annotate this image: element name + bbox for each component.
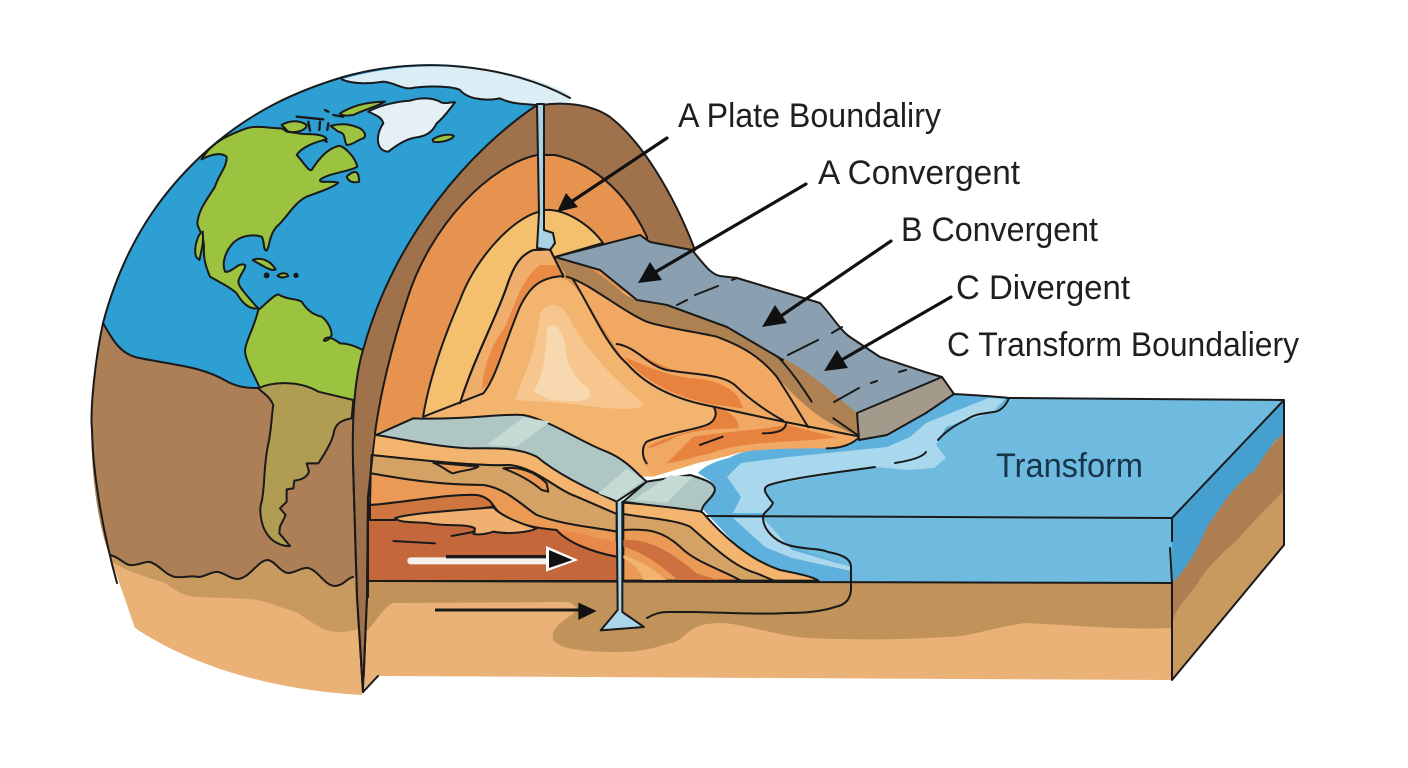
soil base: [365, 581, 1172, 688]
label: A Convergent: A Convergent: [818, 154, 1021, 192]
south america lower: [258, 383, 353, 546]
upper conduit: [537, 104, 555, 250]
peak inner highlight: [533, 325, 590, 401]
main peak body: [373, 276, 716, 477]
band lines: [567, 277, 860, 437]
wedge tick: [363, 676, 378, 692]
sand layer: [112, 562, 362, 695]
orange band: [667, 425, 837, 463]
deep channel: [698, 394, 1009, 582]
orange streak: [482, 265, 562, 390]
darker soil band: [365, 581, 1172, 652]
orange layer: [370, 473, 617, 557]
black arrow: [435, 603, 597, 620]
peach lens: [395, 507, 537, 534]
crust: [353, 104, 695, 692]
orange patch: [647, 407, 739, 448]
vertical rift upper: [537, 104, 555, 250]
wavy boundary: [110, 555, 353, 586]
lower strata: [367, 415, 818, 630]
band: [555, 257, 861, 437]
lower right orange: [642, 405, 860, 477]
pale water band: [727, 398, 1005, 513]
ice shoreline: [342, 79, 537, 105]
wedge under band: [560, 270, 860, 437]
lower soil band: [110, 555, 362, 640]
cut-away dome: [353, 104, 695, 692]
greenland: [368, 98, 455, 152]
current line: [647, 398, 1009, 618]
right grey highlight: [633, 475, 693, 503]
peach layer line: [372, 455, 617, 514]
pale water lower band: [733, 518, 851, 571]
arrow to divergent C: [824, 297, 951, 371]
right peach bottom: [623, 555, 667, 581]
globe exterior: [92, 64, 570, 695]
subducting plate: [555, 235, 954, 440]
peak shoulder: [460, 249, 563, 403]
rust base: [367, 503, 643, 581]
ocean edge lines: [370, 394, 1284, 680]
mantle: [375, 155, 650, 433]
north america: [195, 102, 454, 403]
rust mid layer: [370, 495, 493, 520]
mountain outlines: [423, 249, 860, 463]
lower conduit: [601, 502, 644, 630]
wedge overlay: [353, 433, 375, 692]
plate dashes: [677, 278, 906, 402]
lens peach: [617, 344, 783, 421]
soil front face: [365, 400, 1284, 688]
ocean surface and front: [698, 394, 1284, 584]
white arrow: [407, 546, 578, 572]
peak highlight: [515, 305, 643, 409]
polar ice: [342, 66, 570, 105]
grey highlight lower: [598, 468, 643, 500]
small orange lens: [433, 463, 478, 473]
ocean shoreline: [103, 323, 258, 388]
arrow to plate boundary: [557, 138, 667, 212]
arrow to convergent A: [638, 184, 806, 283]
lens streak: [617, 344, 743, 408]
deep orange stripe: [557, 530, 617, 557]
side face water: [1172, 400, 1284, 583]
grey plate outline: [555, 235, 942, 377]
baseline left: [367, 578, 818, 584]
right grey strip: [623, 475, 715, 512]
brown land mass: [92, 323, 362, 610]
globe outline: [92, 65, 570, 583]
grey strip: [376, 415, 647, 502]
ocean block: [370, 394, 1284, 680]
plate front face: [857, 377, 954, 440]
arrow to convergent B: [762, 241, 891, 327]
right tan layer: [623, 514, 774, 581]
label: Transform: Transform: [996, 447, 1143, 485]
grey plate surface: [555, 235, 942, 413]
label: C Transform Boundaliery: C Transform Boundaliery: [947, 326, 1299, 364]
central mountain: [373, 249, 860, 477]
labels and arrows: [557, 97, 1299, 371]
side face tan: [1172, 402, 1284, 680]
label: B Convergent: B Convergent: [901, 211, 1099, 249]
label: C Divergent: C Divergent: [956, 269, 1131, 307]
right peach layer: [623, 503, 818, 581]
ocean: [103, 64, 540, 420]
inner mantle: [423, 210, 603, 420]
grey highlight: [487, 417, 550, 447]
label: A Plate Boundaliry: A Plate Boundaliry: [678, 97, 941, 135]
second orange lens: [503, 468, 548, 492]
right orange layer: [623, 530, 741, 581]
side face brown: [1172, 433, 1284, 623]
tan layer: [371, 455, 617, 532]
peach layer: [372, 433, 617, 514]
right rust stripe: [623, 540, 720, 581]
rust dashes: [393, 530, 643, 581]
